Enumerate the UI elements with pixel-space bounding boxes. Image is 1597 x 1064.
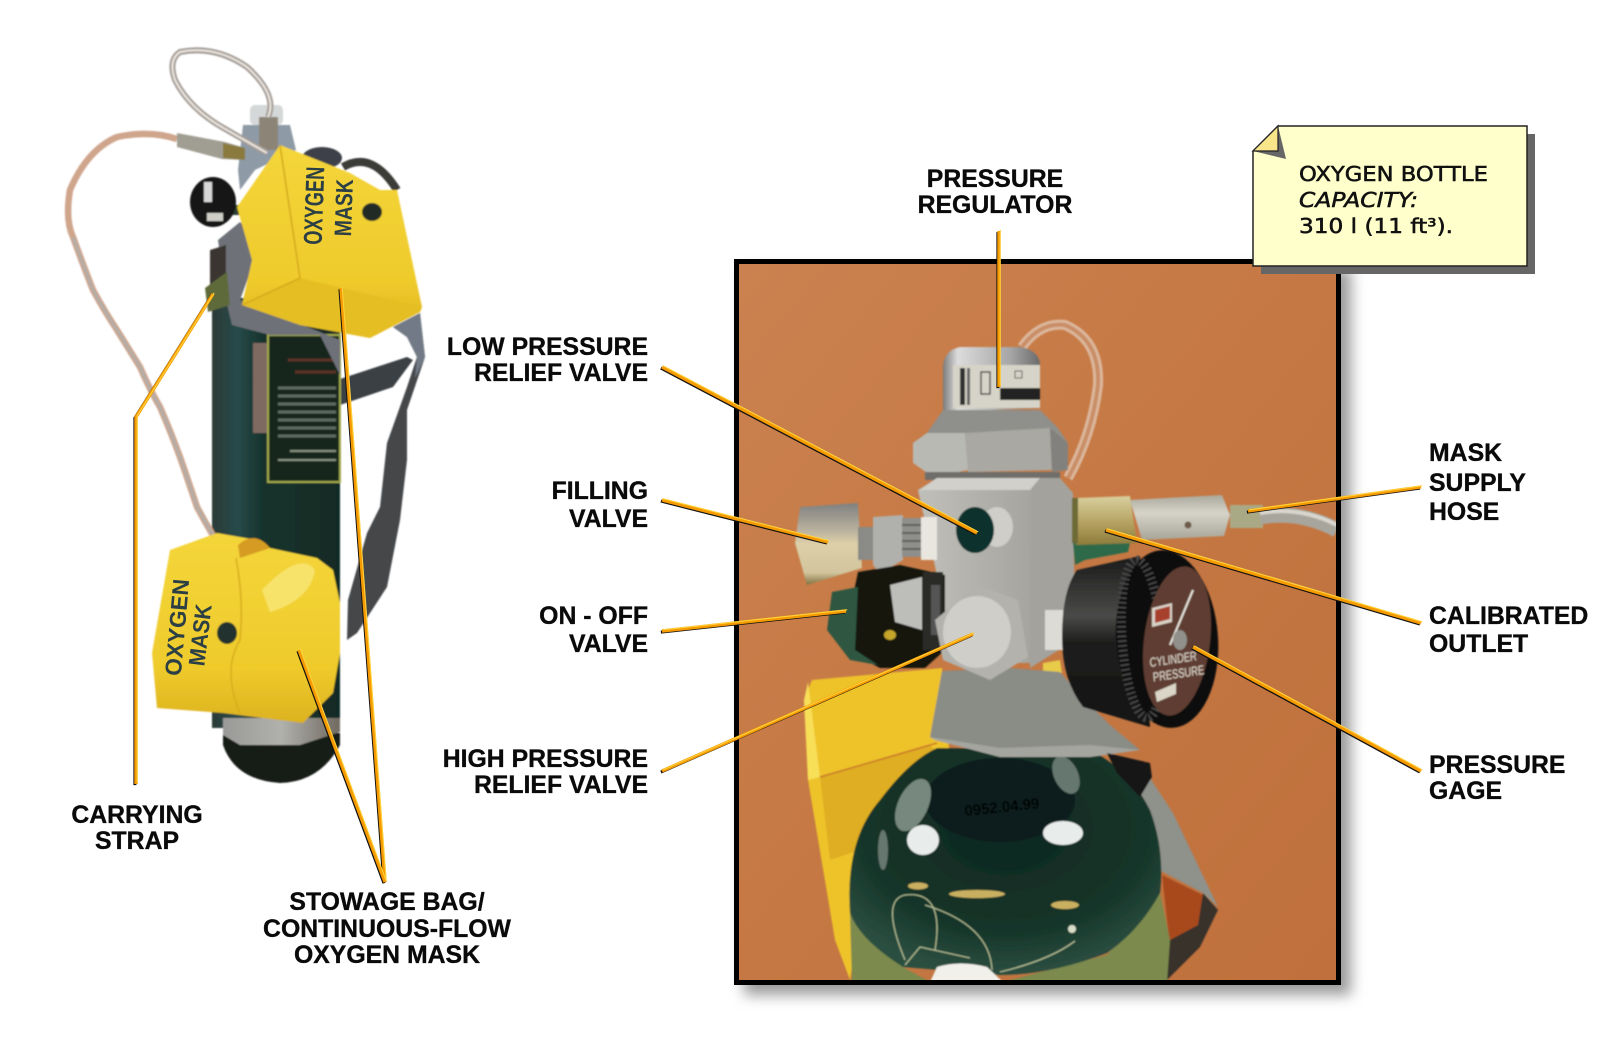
regulator cap: [943, 347, 1040, 412]
photo frame: [734, 259, 1341, 985]
grey strap upper: [930, 668, 1140, 757]
supply fitting: [177, 133, 245, 160]
bottle base: [223, 733, 340, 783]
regulator label: [953, 365, 1040, 408]
photo background: [739, 264, 1336, 980]
leader: carrying strap: [135, 293, 214, 785]
pressure gauge: [1062, 547, 1224, 731]
carrying strap long loop: [347, 313, 425, 640]
note text: 310 l (11 ft³).: [1299, 214, 1453, 238]
on-off valve: [827, 565, 945, 668]
label: calibrated outlet: OUTLET: [1429, 631, 1528, 658]
leader: high pressure relief valve: [661, 633, 974, 772]
label: calibrated outlet: CALIBRATED: [1429, 603, 1588, 630]
leader: mask supply hose: [1247, 486, 1422, 512]
low pressure relief port: [956, 507, 1013, 553]
bottle green wrap: [850, 893, 1170, 982]
note shadow: [1261, 134, 1535, 274]
photo frame shadow: [744, 269, 1351, 995]
valve top body: [238, 125, 296, 190]
dark strap blob: [302, 147, 342, 169]
dome highlights: [878, 752, 1085, 933]
folded corner: [1253, 126, 1286, 159]
bag lettering: MASK: [330, 178, 359, 237]
bottle cylinder: [212, 298, 340, 728]
note text: CAPACITY:: [1299, 188, 1418, 212]
pressure gage black: [190, 177, 243, 227]
filling valve fitting: [795, 503, 937, 585]
label: stowage bag and mask: CONTINUOUS-FLOW: [263, 916, 512, 943]
valve clear cap: [250, 105, 283, 125]
label: filling valve: FILLING: [552, 478, 648, 505]
label: high pressure relief valve: HIGH PRESSURE: [443, 746, 648, 773]
dark strap edge: [1166, 892, 1219, 980]
label: on-off valve: ON - OFF: [539, 603, 648, 630]
regulator collar: [913, 410, 1068, 443]
upper yellow bag: [237, 145, 422, 338]
lower grey strap: [1130, 778, 1218, 907]
bag lettering: OXYGEN: [298, 166, 330, 245]
gauge dial text: CYLINDER: [1149, 650, 1197, 670]
leader: calibrated outlet: [1105, 529, 1422, 624]
label: carrying strap: CARRYING: [71, 802, 203, 829]
note text: [1299, 162, 1488, 238]
upper tube: [172, 50, 270, 153]
label: filling valve: VALVE: [569, 506, 648, 533]
label: high pressure relief valve: RELIEF VALVE: [474, 772, 648, 799]
bottle instruction label: [268, 335, 340, 482]
fine wires: [892, 895, 1075, 972]
gauge stem: [1045, 610, 1063, 650]
panel: right photo of valve assembly: [734, 259, 1341, 985]
outlet brass fitting: [1076, 496, 1137, 545]
stamped bottle marks: 0952.04.99: [964, 795, 1040, 820]
bottle reflection: [253, 343, 273, 433]
bag lettering: [160, 166, 359, 677]
supply hose: [1230, 505, 1337, 530]
label: mask supply hose: HOSE: [1429, 499, 1499, 526]
carrying strap cross section: [337, 357, 413, 405]
leader: pressure regulator: [998, 230, 1000, 388]
black strap fold: [1107, 753, 1152, 797]
label: mask supply hose: MASK: [1429, 440, 1502, 467]
label: pressure regulator: REGULATOR: [918, 192, 1072, 219]
leader: stowage bag pair: [298, 287, 386, 883]
label: on-off valve: VALVE: [569, 631, 648, 658]
bag lettering: OXYGEN: [160, 578, 194, 677]
label: low pressure relief valve: LOW PRESSURE: [447, 334, 648, 361]
gauge needle: [1170, 590, 1193, 645]
label: low pressure relief valve: RELIEF VALVE: [474, 360, 648, 387]
strap loop above bag: [343, 162, 397, 190]
outlet green fitting: [1073, 543, 1130, 565]
leader: pressure gage: [1192, 646, 1422, 772]
label: stowage bag and mask: OXYGEN MASK: [294, 942, 480, 969]
valve neck: [259, 117, 278, 150]
neck strap: [218, 222, 340, 375]
yellow sliver behind gauge: [1043, 660, 1062, 673]
bottle silver band: [223, 718, 340, 745]
left photo: portable oxygen bottle with stowage bags: [68, 50, 425, 783]
white loop: [930, 964, 1003, 982]
note text: OXYGEN BOTTLE: [1299, 162, 1488, 186]
label: pressure regulator: PRESSURE: [927, 166, 1063, 193]
bottle dome: [849, 748, 1161, 975]
gauge dial text: PRESSURE: [1152, 664, 1205, 685]
high pressure relief plug: [934, 596, 1028, 680]
transparent tube: [1022, 325, 1098, 478]
carrying strap upper section: [393, 313, 425, 378]
lower yellow bag: [152, 533, 340, 723]
valve body: [918, 478, 1075, 668]
leader: filling valve: [661, 499, 829, 543]
green strap collar: [205, 272, 230, 312]
callout: oxygen bottle capacity note: [1253, 126, 1535, 274]
knurled coupling: [1130, 495, 1230, 540]
label: carrying strap: STRAP: [95, 828, 179, 855]
yellow bag: [804, 668, 950, 980]
hex nut: [913, 428, 1068, 480]
leader: on-off valve: [661, 610, 847, 632]
note paper: [1253, 126, 1527, 266]
label: stowage bag and mask: STOWAGE BAG/: [289, 889, 485, 916]
label: mask supply hose: SUPPLY: [1429, 470, 1526, 497]
label: pressure gage: GAGE: [1429, 778, 1502, 805]
leader: low pressure relief valve: [661, 366, 978, 534]
gauge brand plate: [1152, 603, 1172, 627]
dome dark crown: [925, 758, 1075, 842]
dark strap behind neck: [210, 245, 226, 290]
red-brown strap reverse: [1162, 875, 1203, 947]
mask hose: [68, 134, 230, 563]
label: pressure gage: PRESSURE: [1429, 752, 1565, 779]
bag lettering: MASK: [183, 602, 217, 667]
